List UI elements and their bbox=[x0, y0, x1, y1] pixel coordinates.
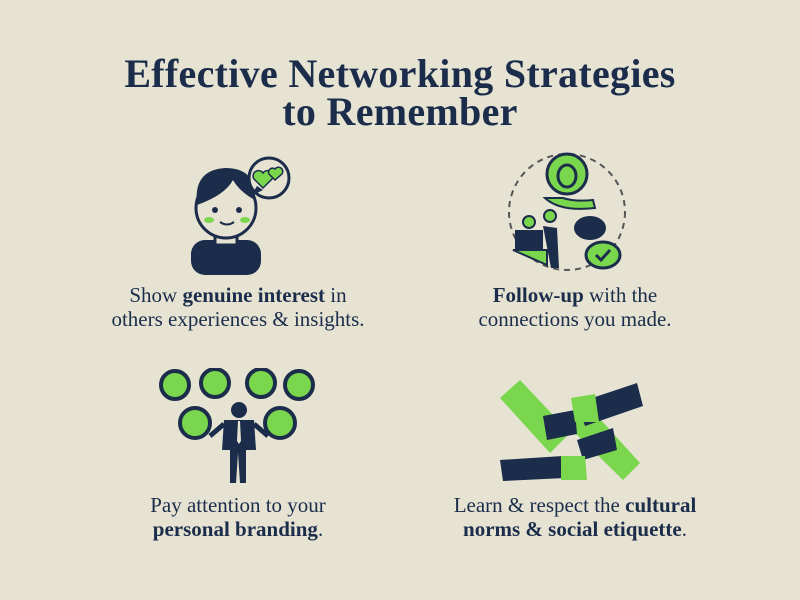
icon: interlocking hands bbox=[500, 380, 643, 481]
text: follow-up: connections you made. bbox=[478, 307, 672, 331]
text: personal branding: personal branding. bbox=[153, 517, 323, 541]
text: cultural norms: norms & social etiquette. bbox=[463, 517, 687, 541]
text: genuine interest bbox=[111, 283, 365, 331]
icon: follow-up cycle bbox=[508, 152, 626, 271]
icon: personal branding bbox=[159, 368, 315, 483]
text: follow-up bbox=[478, 283, 672, 331]
icon: smiling person with heart bubble bbox=[191, 156, 290, 275]
title bbox=[124, 51, 676, 134]
text: cultural norms bbox=[454, 493, 696, 541]
text: cultural norms: Learn & respect the cultural bbox=[454, 493, 696, 517]
text: genuine interest: others experiences & insights. bbox=[111, 307, 365, 331]
text: genuine interest: Show genuine interest in bbox=[129, 283, 347, 307]
text: personal branding bbox=[150, 493, 326, 541]
title: to Remember bbox=[282, 89, 518, 134]
text: follow-up: Follow-up with the bbox=[493, 283, 657, 307]
text: personal branding: Pay attention to your bbox=[150, 493, 326, 517]
title: Effective Networking Strategies bbox=[124, 51, 676, 96]
